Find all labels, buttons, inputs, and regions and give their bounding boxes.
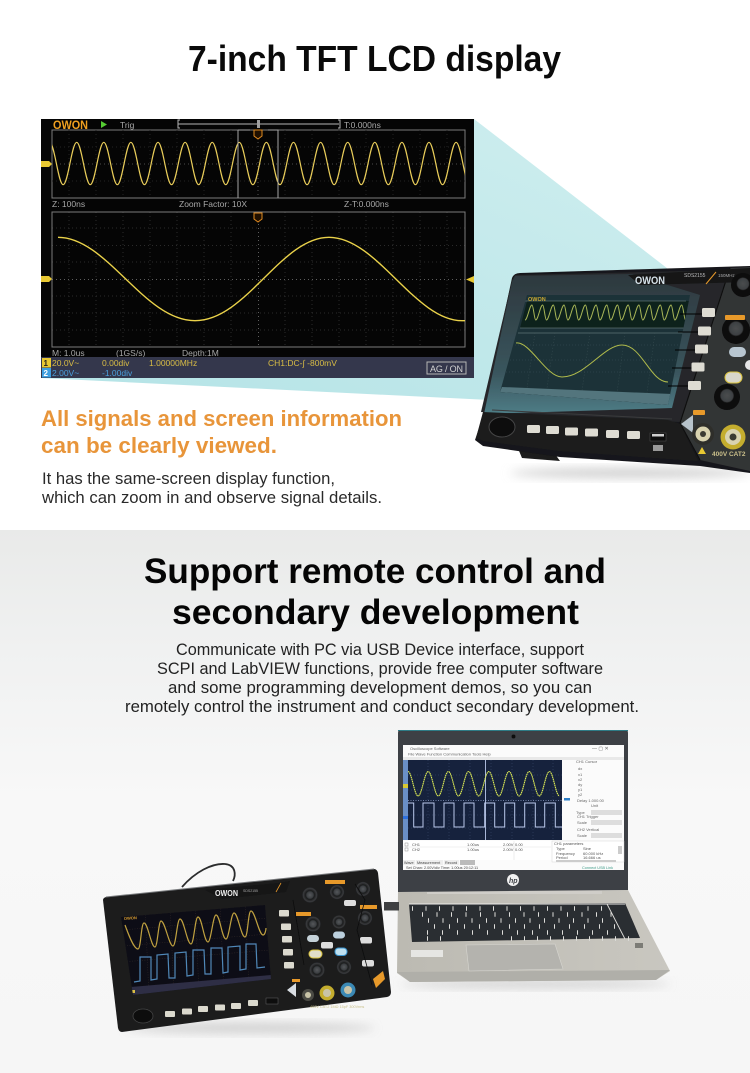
measurement panel: Delay 1.000.00 bbox=[577, 798, 605, 803]
hinge bbox=[427, 890, 602, 894]
signal info box: Sine bbox=[583, 846, 592, 851]
body text: communication: Communicate with PC via USB Device interface, support bbox=[176, 641, 584, 659]
background: white upper section bbox=[0, 0, 750, 530]
warning label bbox=[698, 447, 746, 456]
power button bbox=[489, 417, 515, 437]
panel: enlarged oscilloscope screen bbox=[41, 118, 474, 378]
measurement panel: x2 bbox=[578, 777, 583, 782]
screen header: logo and trigger bar: T:0.000ns bbox=[344, 120, 381, 130]
acquisition info row: M: 1.0us bbox=[52, 348, 85, 358]
logo plate: SDS2155 bbox=[684, 273, 706, 279]
measurement panel: CH1 Trigger bbox=[577, 814, 599, 819]
control knobs bbox=[302, 882, 372, 978]
heading: remote control bbox=[144, 552, 606, 632]
soft keys bbox=[279, 910, 294, 968]
device screen bbox=[500, 295, 690, 405]
right control panel bbox=[680, 267, 750, 471]
status line bbox=[406, 866, 613, 870]
device shadow bbox=[510, 468, 750, 478]
channel status bar: CH1:DC-∫ -800mV bbox=[268, 358, 337, 368]
front key panel bbox=[476, 412, 680, 437]
device body bbox=[475, 266, 750, 473]
logo plate: SDS2155 bbox=[243, 889, 258, 893]
logo plate: OWON bbox=[215, 889, 238, 898]
HP logo bbox=[507, 874, 519, 886]
BNC connectors bbox=[302, 982, 356, 1001]
webcam bbox=[512, 734, 516, 738]
measurement panel: y2 bbox=[578, 792, 583, 797]
laptop screen bbox=[403, 745, 624, 870]
body text: communication: SCPI and LabVIEW functions, provide free computer software bbox=[157, 660, 603, 678]
channel table: CH2 bbox=[412, 847, 421, 852]
channel table: 1.00us bbox=[467, 842, 479, 847]
sticker bbox=[411, 950, 443, 957]
keyboard bbox=[409, 903, 640, 942]
fingerprint reader bbox=[635, 943, 643, 948]
software plot bbox=[403, 760, 562, 840]
device shadow bbox=[125, 1023, 375, 1033]
tab row bbox=[403, 860, 475, 865]
channel status bar: 0.00div bbox=[102, 358, 130, 368]
probe cable bbox=[182, 864, 235, 887]
signal info box: 16.666 us bbox=[583, 855, 601, 860]
logo plate bbox=[205, 881, 290, 899]
signal info box: Type bbox=[556, 846, 565, 851]
channel table: 2.00V bbox=[503, 842, 514, 847]
channel strip bbox=[403, 760, 408, 840]
measurement panel: Unit bbox=[591, 803, 599, 808]
screen top panel bbox=[520, 301, 690, 328]
device feet bbox=[519, 451, 560, 461]
channel status bar: 1 bbox=[44, 359, 48, 368]
channel status bar: -1.00div bbox=[102, 368, 133, 378]
measurement panel bbox=[576, 759, 622, 838]
screen header: logo and trigger bar: Trig bbox=[120, 120, 135, 130]
zoom info row: Zoom Factor: 10X bbox=[179, 199, 247, 209]
screen lower wave bbox=[516, 343, 668, 382]
signal info box: CH1 parameters bbox=[554, 841, 583, 846]
software title and menu: — ▢ ✕ bbox=[592, 746, 609, 752]
heading: remote control: Support remote control and bbox=[144, 552, 606, 591]
laptop shadow bbox=[400, 980, 670, 988]
warning label: 400V CAT2 bbox=[712, 451, 746, 458]
device screen: OWON bbox=[528, 297, 546, 303]
measurement panel: dx bbox=[578, 766, 582, 771]
screen header: logo and trigger bar: OWON bbox=[53, 118, 88, 132]
body text: communication: remotely control the instrument and conduct secondary development. bbox=[125, 698, 639, 716]
measurement panel: Scale bbox=[577, 820, 588, 825]
logo plate: OWON bbox=[635, 275, 665, 287]
screen grid bbox=[506, 333, 680, 393]
tab row: Record bbox=[445, 861, 457, 865]
measurement panel: Type bbox=[576, 810, 585, 815]
orange headline: All signals and screen information bbox=[41, 406, 402, 431]
body text: communication bbox=[125, 641, 639, 716]
channel status bar: 2.00V~ bbox=[52, 368, 79, 378]
knobs bbox=[714, 273, 750, 410]
measurement panel: x1 bbox=[578, 772, 583, 777]
soft keys bbox=[668, 308, 715, 390]
channel status bar: 2 bbox=[44, 369, 48, 378]
device body bbox=[103, 869, 391, 1032]
HP logo: hp bbox=[509, 878, 518, 885]
software title and menu: File Wave Function Communication Tools Help bbox=[408, 752, 491, 756]
channel status bar bbox=[41, 357, 474, 378]
title: 7-inch TFT LCD display: 7-inch TFT LCD display bbox=[188, 38, 561, 79]
panel section lines bbox=[293, 884, 372, 985]
acquisition info row: (1GS/s) bbox=[116, 348, 145, 358]
small screen: OWON bbox=[124, 915, 137, 921]
zoomed waveform plot bbox=[41, 212, 474, 347]
body text: same-screen display bbox=[41, 470, 382, 507]
triangle button bbox=[287, 983, 296, 997]
glass overlay bbox=[484, 274, 700, 414]
USB cable stub between device and laptop bbox=[384, 902, 399, 910]
small panel buttons bbox=[693, 315, 750, 415]
laptop photo bbox=[397, 730, 670, 988]
signal info box: Period bbox=[556, 855, 568, 860]
screen status bar bbox=[500, 387, 672, 405]
status line: Connect USB Link bbox=[582, 866, 613, 870]
bottom function keys bbox=[527, 425, 640, 439]
triangle button bbox=[681, 415, 693, 433]
trackpad bbox=[466, 944, 563, 971]
body text: same-screen display: It has the same-screen display function, bbox=[42, 470, 335, 488]
upper bezel bbox=[481, 270, 733, 422]
software title and menu: Oscilloscope Software bbox=[410, 746, 450, 751]
channel table: 1.00us bbox=[467, 847, 479, 852]
panel buttons bbox=[292, 880, 385, 988]
USB port bbox=[266, 998, 278, 1004]
measurement panel: y1 bbox=[578, 787, 583, 792]
heading: remote control: secondary development bbox=[172, 593, 579, 632]
scroll slider bbox=[564, 798, 570, 800]
body text: same-screen display: which can zoom in and observe signal details. bbox=[41, 489, 382, 507]
orange headline bbox=[41, 406, 402, 458]
signal info box bbox=[552, 841, 624, 862]
background: grey lower section bbox=[0, 530, 750, 1073]
channel table: CH1 bbox=[412, 842, 421, 847]
zoom info row: Z-T:0.000ns bbox=[344, 199, 389, 209]
measurement panel: CH2 Vertical bbox=[577, 827, 599, 832]
tab row: Measurement bbox=[417, 861, 441, 865]
warning label: 400V CAT2 1MΩ 15pF 300Vrms bbox=[310, 1005, 364, 1009]
bottom keys bbox=[165, 1000, 258, 1017]
oscilloscope photo: bottom left device bbox=[103, 869, 391, 1033]
screen header: logo and trigger bar bbox=[53, 118, 381, 132]
screen top wave bbox=[525, 305, 686, 320]
signal info box: 60.000 kHz bbox=[583, 851, 603, 856]
software title and menu bbox=[403, 746, 624, 760]
acquisition info row: Depth:1M bbox=[182, 348, 219, 358]
status line: Set Chan: 2.00V/div Time: 1.00us 20:12:11 bbox=[406, 866, 478, 870]
overview waveform plot bbox=[41, 130, 470, 198]
channel status bar: 20.0V~ bbox=[52, 358, 79, 368]
power button bbox=[133, 1009, 153, 1023]
lid bbox=[398, 730, 628, 892]
orange headline: can be clearly viewed. bbox=[41, 433, 277, 458]
channel status bar: 1.00000MHz bbox=[149, 358, 197, 368]
acquisition info row bbox=[52, 348, 219, 358]
signal info box: Frequency bbox=[556, 851, 575, 856]
channel table bbox=[403, 841, 552, 860]
channel status bar: AG / ON bbox=[430, 364, 463, 374]
logo plate bbox=[628, 268, 750, 285]
laptop base bbox=[397, 890, 670, 982]
measurement panel: Scale bbox=[577, 833, 588, 838]
channel table: 2.00V bbox=[503, 847, 514, 852]
channel table: 0.00 bbox=[515, 847, 524, 852]
body top highlight bbox=[106, 869, 374, 897]
USB port bbox=[650, 433, 666, 451]
tab row: Wave bbox=[404, 861, 414, 865]
zoom info row bbox=[52, 199, 389, 209]
oscilloscope photo: top right device bbox=[475, 266, 750, 478]
measurement panel: CH1 Cursor bbox=[576, 759, 598, 764]
BNC connectors bbox=[692, 423, 746, 450]
small screen bbox=[121, 899, 271, 997]
zoom info row: Z: 100ns bbox=[52, 199, 85, 209]
body text: communication: and some programming development demos, so you can bbox=[168, 679, 592, 697]
logo plate: 150MHz bbox=[718, 273, 736, 278]
measurement panel: dy bbox=[578, 782, 582, 787]
channel table: 0.00 bbox=[515, 842, 524, 847]
teal projection beam from device to enlarged screen bbox=[41, 119, 672, 400]
